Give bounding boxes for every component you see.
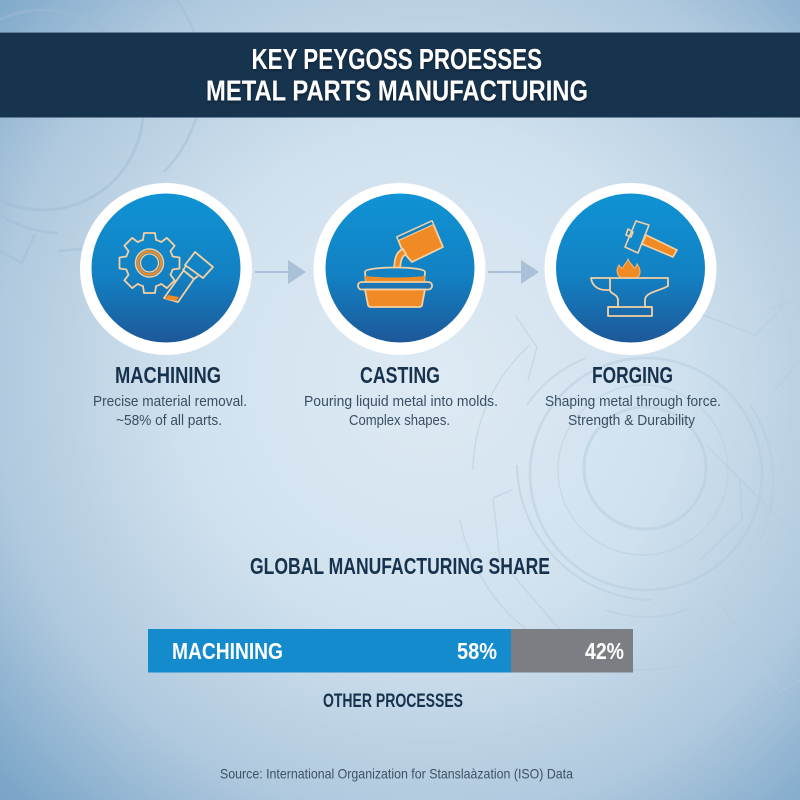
arrow: machining to casting	[255, 260, 306, 284]
icon: gear	[120, 233, 180, 293]
chart label: other processes: OTHER PROCESSES	[323, 690, 463, 712]
machining badge	[80, 183, 252, 355]
forging badge	[544, 183, 716, 355]
process 1: machining	[80, 183, 252, 429]
description: machining: Precise material removal.	[93, 393, 247, 410]
bar segment: other 42%: 42%	[585, 638, 624, 664]
description: machining: ~58% of all parts.	[116, 412, 222, 429]
icon: hammer	[625, 221, 677, 257]
stacked bar chart	[148, 629, 633, 672]
description: machining	[93, 393, 247, 429]
icon: bolt	[164, 252, 213, 302]
process 3: forging	[544, 183, 721, 429]
background gear pattern: bottom right	[460, 300, 800, 692]
process 2: casting	[304, 183, 498, 429]
label: casting: CASTING	[360, 362, 440, 388]
description: casting: Pouring liquid metal into molds.	[304, 393, 498, 410]
title banner	[0, 32, 800, 118]
title: METAL PARTS MANUFACTURING	[206, 76, 588, 108]
description: forging: Strength & Durability	[568, 412, 695, 429]
icon: anvil	[591, 278, 668, 316]
title	[206, 44, 588, 108]
title: KEY PEYGOSS PROESSES	[252, 44, 542, 76]
bar segment: machining 58%: MACHINING	[172, 638, 283, 664]
background gear pattern: top left	[0, 0, 202, 263]
icon: flame	[617, 259, 640, 278]
icon: crucible and mold	[358, 221, 443, 307]
label: forging: FORGING	[592, 362, 673, 388]
arrow: casting to forging	[488, 260, 539, 284]
label: machining: MACHINING	[115, 362, 221, 388]
casting badge	[314, 183, 486, 355]
bar segment: machining 58%: 58%	[457, 638, 497, 664]
description: forging: Shaping metal through force.	[545, 393, 721, 410]
chart heading: GLOBAL MANUFACTURING SHARE	[250, 553, 550, 579]
source note: Source: International Organization for Stanslaàzation (ISO) Data	[220, 766, 573, 782]
description: forging	[545, 393, 721, 429]
bar segment: other 42%	[511, 629, 633, 672]
bar segment: machining 58%	[148, 629, 511, 672]
description: casting	[304, 393, 498, 429]
description: casting: Complex shapes.	[349, 412, 450, 429]
